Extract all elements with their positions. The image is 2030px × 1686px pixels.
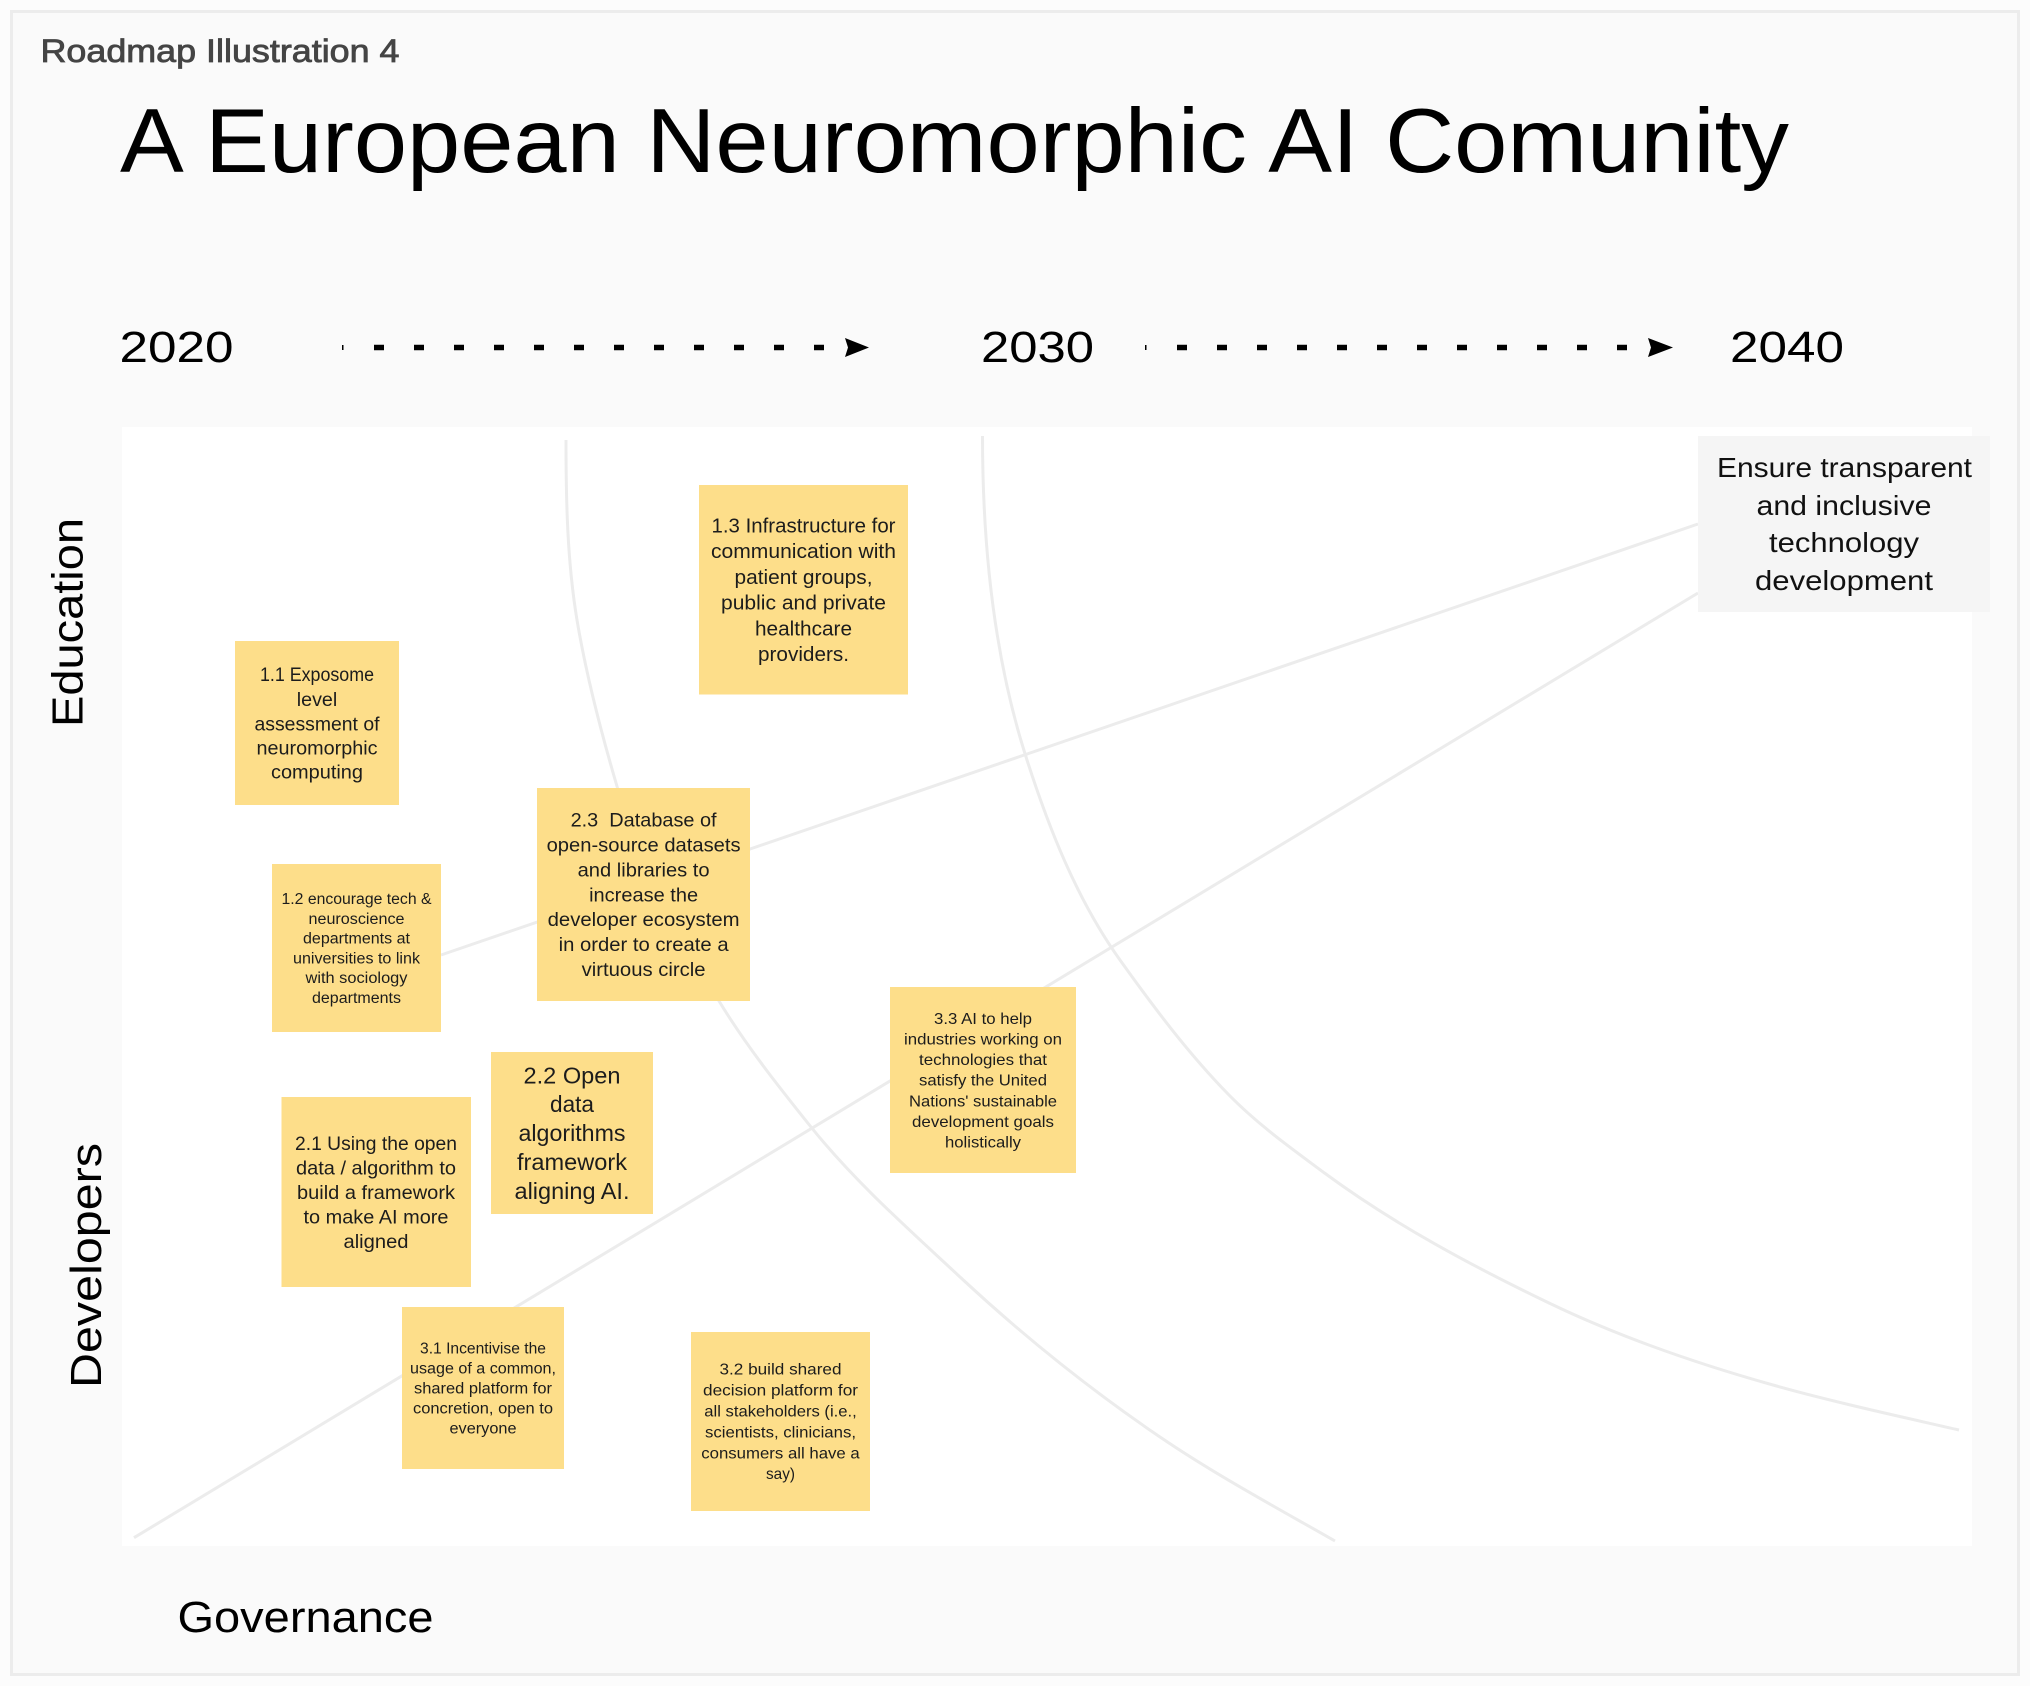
subtitle: Roadmap Illustration 4 xyxy=(40,33,400,69)
sticky 3.2: all stakeholders (i.e., xyxy=(704,1404,857,1420)
sticky 3.3: holistically xyxy=(945,1134,1021,1152)
sticky 1.3: communication with xyxy=(711,540,896,563)
sticky 1.2: neuroscience xyxy=(308,911,404,928)
vertical label: Developers: Developers xyxy=(62,1143,111,1388)
sticky 2.1: to make AI more xyxy=(304,1206,448,1228)
horizontal label: Governance: Governance xyxy=(178,1593,434,1642)
sticky 3.1: concretion, open to xyxy=(413,1400,553,1418)
sticky 2.2: framework xyxy=(517,1149,628,1175)
pathway line to goal (upper) xyxy=(441,524,1698,955)
sticky 1.2: departments xyxy=(312,990,401,1007)
sticky 3.3 xyxy=(890,987,1076,1173)
sticky 1.3: public and private xyxy=(721,592,886,615)
goal text: and inclusive xyxy=(1756,490,1932,521)
vertical label: Education: Education xyxy=(44,518,92,727)
sticky 3.3: 3.3 AI to help xyxy=(934,1011,1032,1028)
sticky 3.3: Nations' sustainable xyxy=(909,1093,1057,1110)
sticky 1.1 xyxy=(235,641,399,805)
sticky 1.3 xyxy=(699,485,908,694)
sticky 2.1: data / algorithm to xyxy=(296,1158,456,1180)
sticky 2.1: 2.1 Using the open xyxy=(295,1133,457,1155)
sticky 3.1: usage of a common, xyxy=(410,1360,556,1378)
sticky 2.3 xyxy=(537,788,750,1001)
sticky 2.1: aligned xyxy=(344,1231,408,1253)
sticky 3.2: 3.2 build shared xyxy=(720,1361,842,1378)
goal text: development xyxy=(1755,565,1933,596)
sticky 3.2: say) xyxy=(766,1466,795,1483)
sticky 3.2: decision platform for xyxy=(703,1382,859,1400)
sticky 2.3: 2.3 Database of xyxy=(571,810,717,832)
sticky 2.2: 2.2 Open xyxy=(524,1062,620,1088)
sticky 1.3: providers. xyxy=(758,643,849,666)
sticky 2.1: build a framework xyxy=(297,1182,455,1204)
sticky 2.2: aligning AI. xyxy=(514,1178,630,1204)
year 2020: 2020 xyxy=(120,323,234,372)
sticky 2.2 xyxy=(491,1052,653,1214)
goal text: Ensure transparent xyxy=(1717,452,1972,483)
sticky 3.2: consumers all have a xyxy=(701,1445,860,1462)
sticky 2.3: increase the xyxy=(589,884,698,906)
sticky 2.2: data xyxy=(550,1091,594,1117)
sticky 1.2: 1.2 encourage tech & xyxy=(282,891,432,908)
sticky 3.3: satisfy the United xyxy=(919,1073,1047,1090)
sticky 3.3: technologies that xyxy=(919,1052,1048,1069)
sticky 1.1: computing xyxy=(271,763,363,784)
sticky 2.3: in order to create a xyxy=(559,934,729,956)
sticky 3.3: development goals xyxy=(912,1114,1054,1131)
sticky 2.3: developer ecosystem xyxy=(548,909,740,931)
pathway line to goal (lower) xyxy=(134,593,1698,1538)
title: A European Neuromorphic AI Comunity xyxy=(120,91,1790,192)
sticky 3.2: scientists, clinicians, xyxy=(705,1424,856,1441)
year 2040: 2040 xyxy=(1730,323,1844,372)
arrow 2020 to 2030 xyxy=(342,338,869,357)
horizon curve 2 xyxy=(982,436,1959,1430)
sticky 1.1: assessment of xyxy=(254,714,380,735)
sticky 3.3: industries working on xyxy=(904,1032,1062,1049)
sticky 3.1: shared platform for xyxy=(414,1380,552,1398)
sticky 1.1: level xyxy=(297,690,337,711)
sticky 1.2: universities to link xyxy=(293,950,420,967)
sticky 2.1 xyxy=(282,1097,471,1287)
sticky 1.2: departments at xyxy=(303,931,411,948)
sticky 2.2: algorithms xyxy=(518,1120,626,1146)
sticky 2.3: and libraries to xyxy=(578,859,710,881)
sticky 2.3: open-source datasets xyxy=(547,834,741,856)
sticky 3.1: 3.1 Incentivise the xyxy=(420,1340,546,1357)
goal box xyxy=(1698,436,1990,612)
goal text: technology xyxy=(1769,527,1919,558)
sticky 1.3: 1.3 Infrastructure for xyxy=(712,514,896,537)
sticky 3.2 xyxy=(691,1332,870,1511)
sticky 1.1: 1.1 Exposome xyxy=(260,665,374,686)
white roadmap panel xyxy=(122,427,1972,1546)
arrow 2030 to 2040 xyxy=(1145,338,1673,357)
sticky 1.3: patient groups, xyxy=(734,566,872,589)
year 2030: 2030 xyxy=(981,323,1094,372)
sticky 3.1 xyxy=(402,1307,564,1469)
horizon curve 1 xyxy=(566,440,1335,1541)
sticky 1.3: healthcare xyxy=(755,617,852,640)
goal text xyxy=(1717,452,1972,596)
sticky 1.1: neuromorphic xyxy=(256,738,378,760)
sticky 1.2 xyxy=(272,864,441,1032)
sticky 3.1: everyone xyxy=(450,1420,516,1438)
sticky 1.2: with sociology xyxy=(304,970,408,987)
sticky 2.3: virtuous circle xyxy=(582,959,706,981)
timeline xyxy=(120,323,1844,372)
